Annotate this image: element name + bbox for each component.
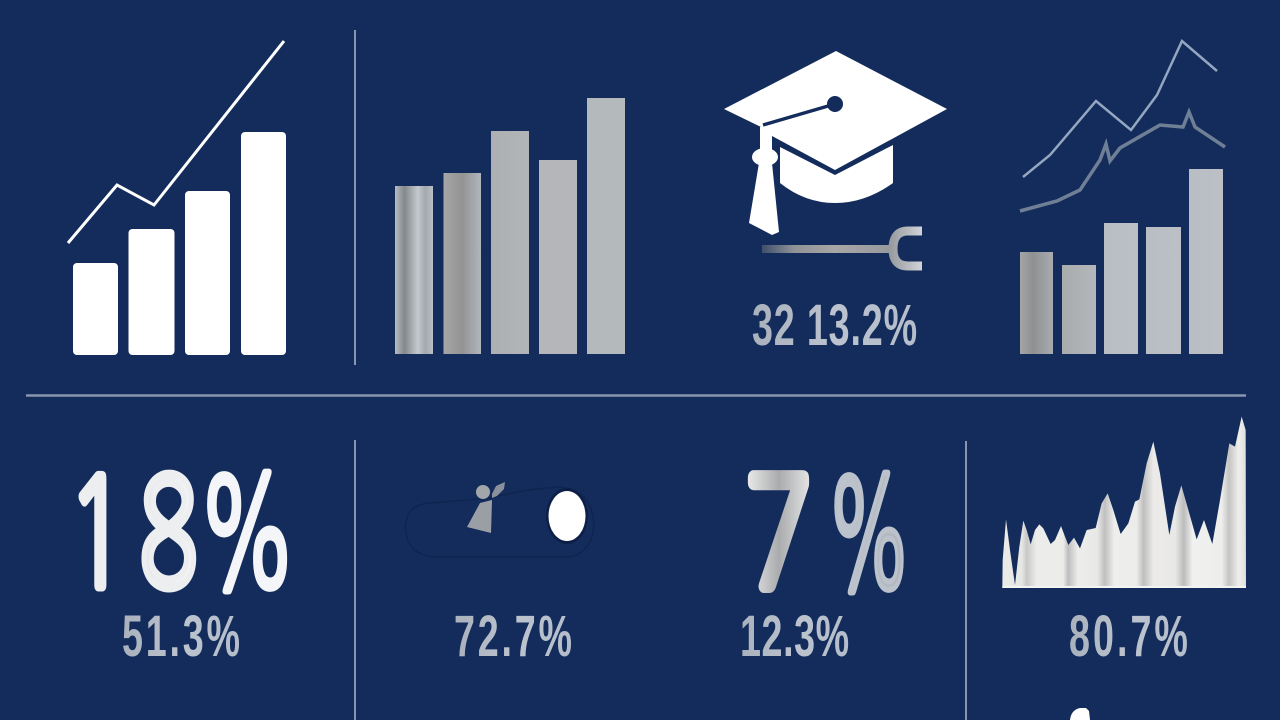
icon: toggle pill with figure (405, 482, 594, 557)
stat: 72.7%: 72.7% (454, 605, 572, 669)
icon: silver wrench bar (762, 231, 922, 266)
stat: 32 13.2%: 32 13.2% (752, 294, 917, 358)
stat: 7%: 7 (744, 459, 814, 609)
stat: 18% (67, 458, 297, 612)
stat: 7%: % (826, 461, 912, 613)
stat: 18%: % (198, 460, 297, 612)
icon: cropped white blob (1070, 708, 1090, 720)
panel: line and bar combo chart (1020, 41, 1225, 354)
panel: white bar chart with trend line (68, 41, 286, 355)
panel: silver area chart (1002, 417, 1246, 588)
stat: 80.7%: 80.7% (1069, 605, 1188, 669)
stat: 7% (744, 459, 912, 613)
stat: 18%: 18 (67, 458, 199, 609)
stat: 51.3%: 51.3% (122, 605, 240, 669)
panel: silver bar chart (395, 98, 625, 354)
stat: 12.3%: 12.3% (740, 605, 849, 669)
icon: graduation cap (724, 51, 947, 235)
